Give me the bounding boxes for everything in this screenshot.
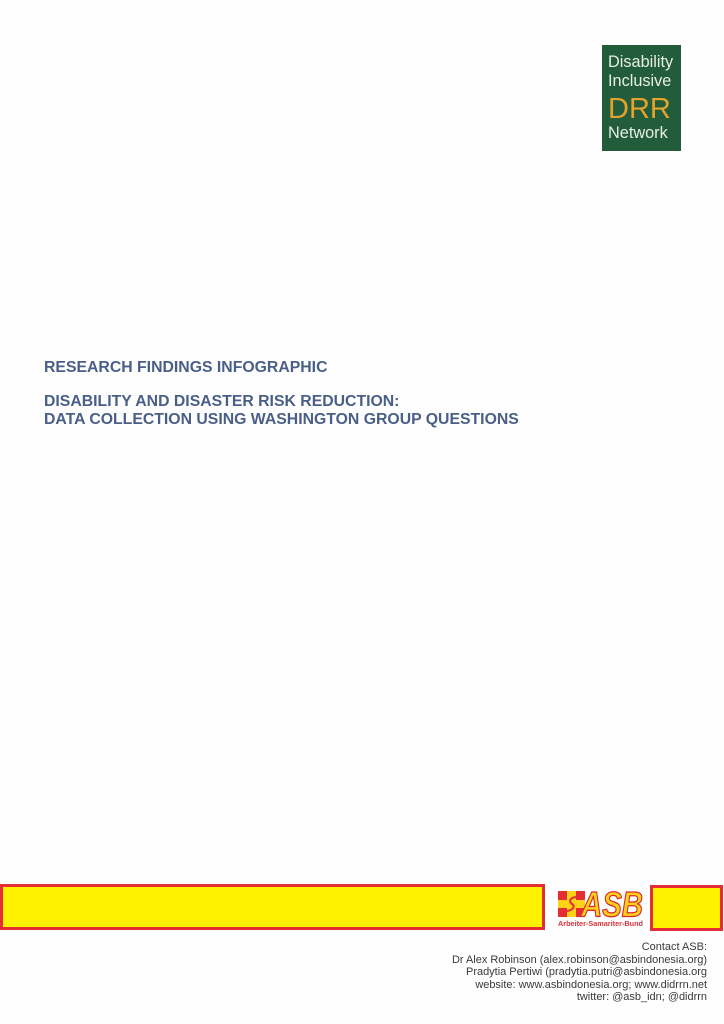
contact details: Dr Alex Robinson (alex.robinson@asbindonesia.org) xyxy=(452,954,707,966)
logo: ASB Arbeiter-Samariter-Bund xyxy=(558,888,643,928)
logo text: DRR: DRR xyxy=(608,93,671,125)
contact details xyxy=(452,941,707,1003)
heading: report title xyxy=(44,392,519,428)
logo text: Inclusive: Inclusive xyxy=(608,72,671,90)
logo text: Network: Network xyxy=(608,124,668,142)
logo text: Disability: Disability xyxy=(608,53,673,71)
footer bar: yellow left panel xyxy=(0,884,545,930)
contact details: website: www.asbindonesia.org; www.didrrn.net xyxy=(475,978,707,990)
heading: report title: DISABILITY AND DISASTER RISK REDUCTION: xyxy=(44,392,399,410)
contact details: Pradytia Pertiwi (pradytia.putri@asbindonesia.org xyxy=(466,966,707,978)
contact details: twitter: @asb_idn; @didrrn xyxy=(577,991,707,1003)
contact details: Contact ASB: xyxy=(642,941,707,953)
icon: ASB cross xyxy=(558,891,585,917)
heading: research findings infographic: RESEARCH FINDINGS INFOGRAPHIC xyxy=(44,359,327,376)
logo: Disability Inclusive DRR Network xyxy=(602,45,681,151)
heading: report title: DATA COLLECTION USING WASHINGTON GROUP QUESTIONS xyxy=(44,410,519,428)
logo caption: Arbeiter-Samariter-Bund: Arbeiter-Samariter-Bund xyxy=(558,919,643,928)
footer bar: yellow right panel xyxy=(650,885,723,931)
